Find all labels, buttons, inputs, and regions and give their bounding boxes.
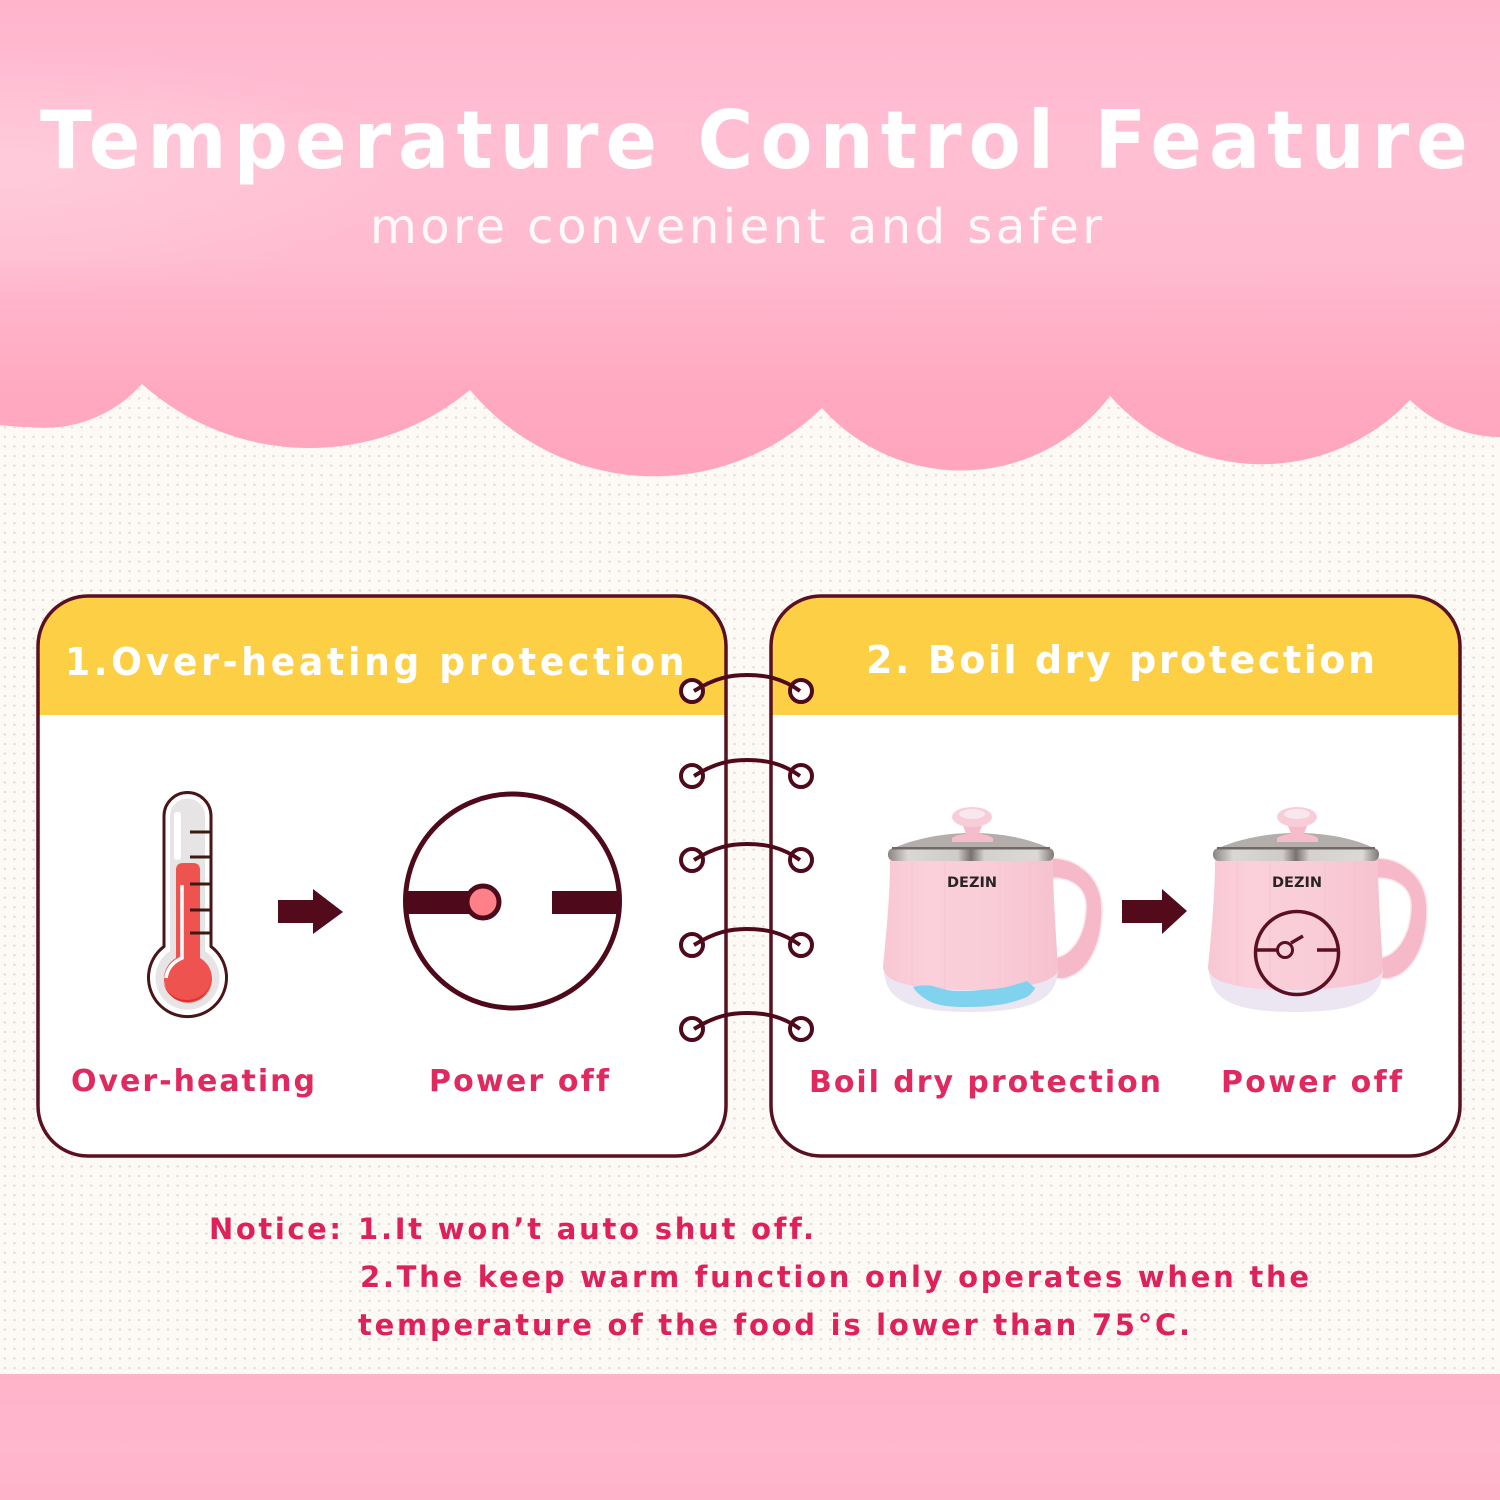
notice text block: Notice: [209,1212,341,1246]
header banner with scalloped edge [0,0,1500,476]
label: boil dry protection: Boil dry protection [809,1065,1161,1100]
footer band [0,1374,1500,1500]
notice text block [209,1212,1309,1342]
label: over-heating: Over-heating [71,1064,315,1099]
icon: open switch circle [405,794,620,1008]
panel heading: over-heating protection: 1.Over-heating protection [65,640,684,684]
icon: kettle with water: DEZIN [947,875,997,891]
label: power off: Power off [429,1064,610,1099]
notice text block: temperature of the food is lower than 75°C. [358,1308,1190,1342]
icon: thermometer [148,792,227,1017]
arrow: boil dry to power off [1122,889,1187,934]
notice text block: 1.It won’t auto shut off. [358,1212,814,1246]
icon: kettle with switch [1208,807,1427,1012]
icon: kettle with water [883,807,1102,1012]
title: Temperature Control Feature [40,95,1468,187]
arrow: over-heating to power off [278,889,343,934]
panel: over-heating protection [38,596,726,1156]
panel heading: boil dry protection: 2. Boil dry protection [866,638,1375,682]
label: power off: Power off [1221,1065,1403,1100]
notice text block: 2.The keep warm function only operates when the [360,1260,1309,1294]
subtitle: more convenient and safer [370,199,1102,255]
panel: boil dry protection [771,596,1460,1156]
icon: kettle with switch: DEZIN [1272,875,1322,891]
binder rings connecting the panels [681,675,812,1040]
